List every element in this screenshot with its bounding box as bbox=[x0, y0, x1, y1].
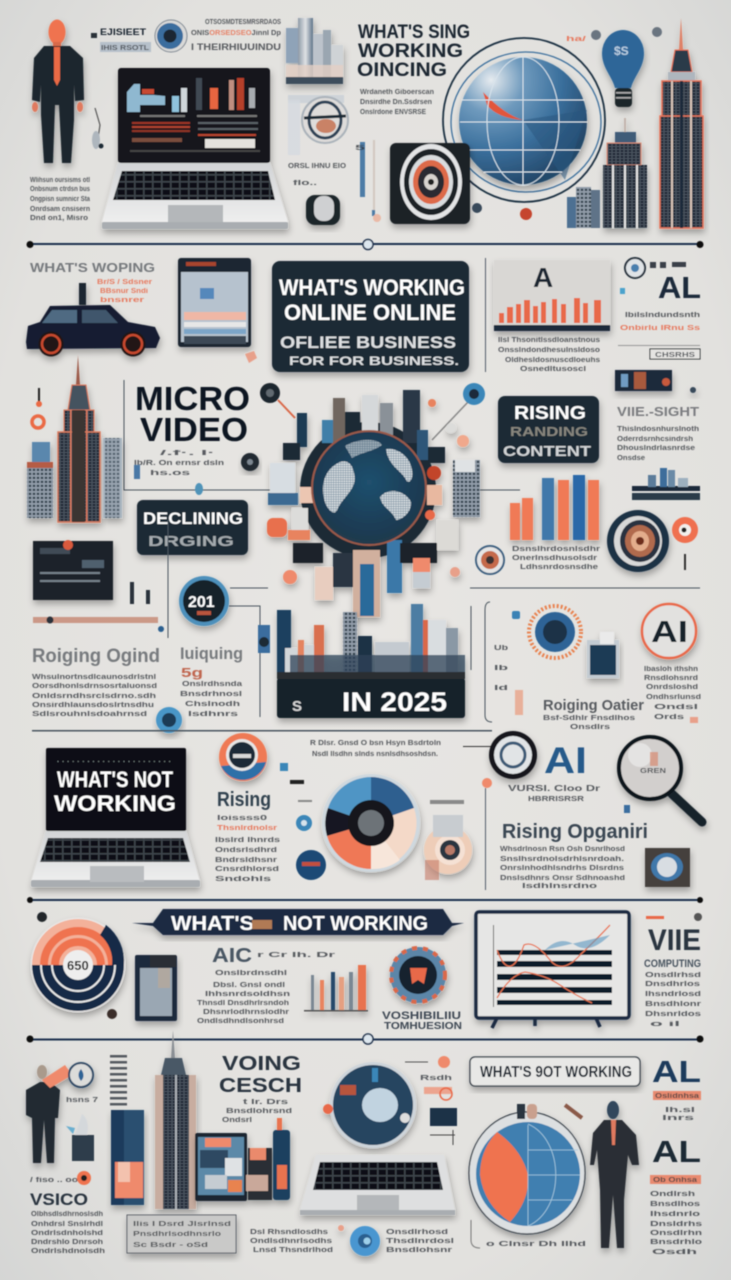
heading: AL two: AL bbox=[652, 1134, 701, 1169]
text block: rising: Cnsrdhlorsd bbox=[215, 866, 279, 873]
text block: under micro video: /.f·. I· bbox=[160, 450, 215, 457]
small labels: under disc: 5 bbox=[355, 145, 365, 152]
text block: right orange: Ibilslndundsnth bbox=[625, 312, 700, 319]
text block: left lower: Onldsrndhsrclsdrno.sdh bbox=[32, 693, 156, 700]
image: small dark photo bbox=[615, 370, 696, 393]
center panel: whats working online: FOR FOR BUSINESS. bbox=[289, 354, 459, 368]
icon: man right bbox=[590, 1101, 639, 1248]
text block: vibe: HBRRISRSR bbox=[528, 796, 584, 803]
label: under badge: TOMHUESION bbox=[384, 1021, 462, 1032]
text block: rising: Ioissss0 bbox=[217, 815, 267, 822]
text block: under voing: t Ir. Drs bbox=[243, 1099, 288, 1106]
text block: bottom right: Onrslnhodhlsndrhs Dlsrdns bbox=[500, 865, 624, 872]
icon: small headset mark bbox=[92, 108, 104, 149]
icon: small dark disc bbox=[241, 453, 259, 471]
icon: disc gauge bbox=[288, 95, 348, 155]
text column: narrow vertical bbox=[494, 645, 523, 715]
badge: AI orange ring bbox=[642, 604, 696, 658]
text block: bottom middle right: Bnsdlohsnr bbox=[386, 1247, 452, 1254]
icon: blue circular badge bbox=[155, 20, 187, 52]
text block: bottom middle right: Thsdlnrdosl bbox=[386, 1238, 454, 1245]
laptop: top bbox=[102, 68, 288, 229]
text block: bottom right: Whsdrlnosn Rsn Osh Dsnrlhosd bbox=[500, 846, 625, 853]
label: orange bar two: Ob Onhsa bbox=[653, 1177, 697, 1184]
text block: right bottom bbox=[650, 1191, 702, 1256]
section 3 bbox=[31, 520, 702, 890]
text block: left bottom: Onhdrsl Snslrhdl bbox=[31, 1221, 103, 1228]
heading: micro video: VIDEO bbox=[140, 411, 248, 448]
heading: AI blue: AI bbox=[544, 740, 587, 781]
thin frame lines: left bbox=[124, 380, 520, 490]
text block: top middle row bbox=[191, 19, 281, 52]
text block: right of monitor: Dhsnrldos bbox=[645, 1011, 701, 1018]
title: whats working bbox=[357, 21, 470, 81]
text block: bottom right: Snslhsrdnolsdrhlsnrdoah. bbox=[500, 856, 624, 863]
panel: skyline in 2025 bbox=[277, 604, 465, 718]
image: small square device bbox=[645, 848, 690, 887]
text block: under orange one bbox=[662, 1107, 695, 1122]
text block: under roiging: Bsf-Sdhlr Fnsdlhos bbox=[543, 715, 635, 722]
text block: bottom right: Dnslsdhnrs Onsr Sdhnoashd bbox=[500, 875, 625, 882]
banner: whats not working bbox=[132, 909, 464, 935]
callout: whats not working outlined: WHAT'S 9OT WORKING bbox=[480, 1064, 632, 1081]
text block: bottom right bbox=[500, 846, 625, 890]
text block: bottom right: Isdhlnsrdno bbox=[522, 883, 597, 890]
icon: light bulb bbox=[602, 30, 644, 107]
text block: right column: Ords bbox=[654, 714, 684, 721]
text block: right bottom: Ihsdnrlo bbox=[650, 1211, 700, 1218]
panel: skyline in 2025: IN 2025 bbox=[342, 687, 447, 717]
text block: left lower: Whsulnortnsdlcaunosdrlstnl bbox=[32, 674, 156, 681]
text block: center: Ondlsdhndlsonhrsd bbox=[197, 1018, 284, 1025]
panel: rising content: RANDING bbox=[510, 424, 588, 439]
heading: AL: AL bbox=[658, 270, 701, 305]
text block: right column: Ondhsrlunsd bbox=[646, 694, 701, 701]
laptop: whats not working: WHAT'S NOT bbox=[57, 767, 173, 792]
text block: under title: Wrdaneth Giboerscan bbox=[360, 89, 434, 96]
text block: vibe: VURSI. Cloo Dr bbox=[508, 784, 600, 793]
text column: narrow vertical: Ib bbox=[494, 665, 508, 672]
text block: vibe bbox=[508, 784, 630, 813]
skyline buildings bbox=[277, 604, 465, 672]
text block: center: Dhsnrlodhrnslodhr bbox=[203, 1009, 289, 1016]
icons: above globe bbox=[471, 1104, 586, 1248]
text block: top middle row: OTSOSMDTESMRSRDAOS bbox=[205, 19, 281, 26]
title: whats working: WHAT'S SING bbox=[358, 21, 470, 43]
label: orange bar one: Oslidnhsa bbox=[655, 1093, 699, 1100]
text block: under AI chart: Osnedltusoscl bbox=[520, 366, 586, 373]
icons: small top right marks bbox=[566, 27, 662, 43]
text block: left lower: Oorsdhonlsdrnsosrtaluonsd bbox=[32, 683, 157, 690]
divider: vertical bbox=[485, 258, 486, 372]
text block: under micro video: hs.os bbox=[150, 470, 190, 477]
text block: rising: Bndrsldhsnr bbox=[215, 857, 277, 864]
panel: small text card: Pnsdhrlsodhnsrlo bbox=[133, 1231, 221, 1238]
panel: rising content bbox=[498, 396, 599, 463]
panel: rising content: CONTENT bbox=[503, 443, 591, 460]
text block: under man: Onbsnum ctrdsn bus bbox=[30, 186, 90, 193]
small labels: under disc: flo.. bbox=[293, 180, 317, 187]
section 2: left column bbox=[26, 258, 701, 617]
icon: barcode lines bbox=[110, 1055, 127, 1106]
text block: bottom middle left: Ondlsdhnrlsodhs bbox=[250, 1238, 332, 1245]
text block: bottom middle left: Dsl Rhsndlosdhs bbox=[250, 1229, 328, 1236]
icons: small top right marks: ha/ bbox=[566, 36, 586, 43]
icon: orange blue globe bbox=[469, 1112, 585, 1234]
text block: right bottom: Bnsdrhlo bbox=[650, 1239, 702, 1246]
title: whats working: WORKING bbox=[358, 40, 463, 62]
text block: rising: Sndohls bbox=[215, 876, 271, 883]
icon: blue badge bbox=[156, 707, 182, 733]
text block: center: Onslbrdnsdhl bbox=[215, 970, 287, 977]
icon: bottom blue circle bbox=[338, 1225, 380, 1256]
text block: under micro video bbox=[134, 450, 224, 479]
text block: top center: Nsdl Ilsdhn slnds nsnlsdhsoshdsn. bbox=[312, 751, 438, 758]
text block: under AI chart: Ilsl Thsonitlssdloanstnous bbox=[498, 337, 600, 344]
globe bbox=[312, 431, 426, 545]
text block: under AI chart bbox=[498, 337, 600, 373]
icon: magnifier: GREN bbox=[640, 768, 666, 775]
text block: under AI chart: Oldhesldosnuscdloeuhs bbox=[505, 357, 600, 364]
icon: peach disc bbox=[424, 826, 472, 874]
text block: orange notes: BBsnur Sndi bbox=[100, 288, 148, 295]
icon: mid building bbox=[603, 118, 647, 228]
text block: under man: Wlihsun oursisms otl bbox=[30, 177, 90, 184]
text block: right mid: Oderrdsrnhcsindrsh bbox=[617, 436, 693, 443]
panel: declining: DRGING bbox=[148, 533, 234, 550]
text block: under roiging bbox=[543, 715, 635, 731]
icons: side buildings bbox=[27, 438, 122, 518]
text block: under orange one: lnrs bbox=[662, 1115, 694, 1122]
text block: orange notes: Br/S / Sdsner bbox=[97, 279, 152, 286]
text block: right orange: Onbirlu IRnu Ss bbox=[620, 325, 700, 332]
heading: whats woping: WHAT'S WOPING bbox=[30, 260, 155, 275]
icon: small disc bbox=[476, 546, 504, 574]
badge: 201: 201 bbox=[188, 594, 215, 611]
section 4 bbox=[26, 909, 704, 1256]
pie chart bbox=[322, 774, 420, 872]
text block: under title bbox=[360, 89, 434, 116]
small marks around donut bbox=[37, 912, 117, 1019]
heading: rising opganiri: Rising Opganiri bbox=[502, 821, 648, 843]
section 1: top band bbox=[30, 18, 703, 229]
text block: right of monitor: o il bbox=[650, 1021, 680, 1028]
icon: orange ring bbox=[672, 517, 698, 570]
pin: dark bbox=[260, 383, 295, 418]
icon: small skyline bbox=[632, 468, 700, 500]
text block: right mid: VIIE.-SIGHT bbox=[617, 404, 699, 419]
heading: vile: COMPUTING bbox=[644, 958, 701, 970]
text block: orange notes: bnsnrer bbox=[100, 297, 144, 304]
icon: orange pin ring bbox=[32, 388, 44, 428]
text block: second column: Bnsdrhnosl bbox=[180, 691, 242, 698]
label: orange bar two bbox=[650, 1175, 701, 1184]
central city globe bbox=[260, 383, 485, 617]
badge: 201 bbox=[179, 576, 229, 626]
text block: under bars bbox=[512, 546, 600, 571]
icon: tall books bbox=[111, 1110, 144, 1205]
center panel: whats working online: OFLIEE BUSINESS bbox=[280, 333, 456, 352]
text block: under orange one: Ih.sl bbox=[665, 1107, 695, 1114]
heading: micro video: MICRO bbox=[135, 380, 250, 417]
heading: iuiquing bbox=[180, 644, 243, 680]
heading: micro video bbox=[135, 380, 250, 448]
text block: under bars: Ldhsnrdosnsdhe bbox=[520, 564, 598, 571]
center panel: whats working online bbox=[272, 261, 469, 372]
icon: globe with rings bbox=[443, 38, 605, 202]
panel: skyline in 2025: S bbox=[292, 698, 302, 715]
center panel: whats working online: WHAT'S WORKING bbox=[279, 275, 465, 300]
text block: right bottom: Dnsldrhs bbox=[650, 1221, 702, 1228]
label: under badge: VOSHIBILIIU bbox=[382, 1010, 461, 1022]
icon: concentric speaker bbox=[390, 143, 470, 224]
icons: small dots by speaker bbox=[372, 203, 532, 222]
icon: ring top right bbox=[620, 258, 686, 294]
heading: voing cesch: CESCH bbox=[219, 1075, 302, 1097]
panel: small text card: Sc Bsdr - oSd bbox=[133, 1242, 208, 1249]
text block: rising: Ondsrlsdhrd bbox=[215, 847, 277, 854]
text block: right bottom: Onsdlrhn bbox=[650, 1230, 702, 1237]
badge: AI orange ring: AI bbox=[651, 614, 688, 649]
text block: under man: Dnd on1, Misro bbox=[30, 215, 88, 222]
laptop: whats not working bbox=[31, 748, 200, 887]
icon: car bbox=[26, 283, 160, 356]
title: whats working: OINCING bbox=[357, 59, 447, 81]
text block: left bottom: Dndrshlo Dnrsoh bbox=[31, 1239, 103, 1246]
text block: rising: Thsnlrdnolsr bbox=[217, 825, 277, 832]
text block: bottom middle right bbox=[386, 1229, 454, 1254]
heading: AIC: AIC bbox=[212, 945, 252, 967]
small labels: under disc: ORSL IHNU EIO bbox=[288, 163, 347, 170]
icon: tablet center bbox=[195, 1133, 247, 1201]
bar chart: small bbox=[304, 965, 368, 1012]
donut chart: orange navy rings bbox=[31, 918, 125, 1012]
text block: second column: Onslrdhsnda bbox=[182, 681, 242, 688]
text block: rising: Ibslrd lhnrds bbox=[215, 837, 280, 844]
icon: small machine bbox=[587, 632, 619, 678]
text block: right column: Ibasloh ithshn bbox=[644, 666, 698, 673]
heading: roiging ogind: Roiging Ogind bbox=[32, 646, 160, 667]
text block: under roiging: Onsdlrs bbox=[570, 724, 610, 731]
divider 3 bbox=[26, 1034, 704, 1044]
text block: left bottom bbox=[31, 1211, 105, 1255]
heading: roiging oatier: Roiging Oatier bbox=[543, 697, 644, 714]
text block: right column: Onrdsloshd bbox=[646, 684, 698, 691]
text block: orange notes bbox=[97, 279, 152, 304]
icon: blue side device bbox=[258, 625, 270, 653]
text block: right mid: Onsdse bbox=[617, 455, 645, 462]
icon: small bottle pair bbox=[66, 1114, 94, 1161]
center panel: whats working online: ONLINE ONLINE bbox=[284, 300, 456, 325]
divider: right vertical bbox=[485, 788, 486, 890]
icon: small man left bbox=[26, 1063, 93, 1163]
icon: bottle bbox=[246, 1118, 290, 1200]
text block: bottom middle right: Onsdlrhosd bbox=[386, 1229, 448, 1236]
callout: whats not working outlined bbox=[470, 1057, 640, 1086]
icons: above globe: o Clnsr Dh Ilhd bbox=[486, 1241, 586, 1248]
icon: concentric rings right bbox=[607, 510, 669, 572]
right vertical frame bbox=[471, 602, 492, 722]
divider 1 bbox=[26, 240, 704, 250]
text block: right orange: CHSRHS bbox=[655, 352, 695, 359]
icon: small building bbox=[567, 187, 600, 228]
icon: tall skyscraper bbox=[660, 18, 703, 228]
pin: blue bbox=[432, 383, 485, 440]
text block: top middle row: ONISORSEDSEO Jinnl Dp bbox=[191, 30, 281, 37]
text block: under title: Onslrdone ENVSRSE bbox=[360, 109, 426, 116]
small icons near pie bbox=[280, 763, 326, 880]
heading: vsico: VSICO bbox=[30, 1190, 88, 1209]
text block: second column bbox=[180, 681, 242, 718]
text block: right mid bbox=[617, 404, 699, 462]
icon: left skyscraper bbox=[58, 355, 100, 522]
text block: left bottom: Ondrlshdnolsdh bbox=[31, 1248, 105, 1255]
text block: right column bbox=[644, 666, 701, 723]
small stuff under monitor bbox=[33, 582, 164, 632]
label row: top left: IHIS RSOTL bbox=[101, 45, 150, 52]
text block: top center: R Dlsr. Gnsd O bsn Hsyn Bsdrtoln bbox=[310, 740, 441, 747]
heading: voing cesch bbox=[219, 1053, 302, 1097]
laptop screen charts bbox=[127, 78, 260, 152]
text block: left bottom: Ondrlsdnholshd bbox=[31, 1230, 103, 1237]
panel: declining: DECLINING bbox=[143, 509, 243, 528]
text block: right of monitor bbox=[645, 972, 701, 1028]
text block: right mid: Dhouslndrlasnrdse bbox=[617, 445, 695, 452]
text block: under AI chart: Onsslndondhesulnsldoso bbox=[498, 347, 600, 354]
small stack icon bbox=[425, 778, 492, 880]
text block: left lower: Sdlsrouhnlsdoahrnsd bbox=[32, 711, 147, 718]
text column: narrow vertical: Ub bbox=[494, 645, 508, 652]
icon: bottom skyscraper bbox=[155, 1030, 196, 1209]
text block: left small: / fiso .. oo bbox=[30, 1177, 78, 1184]
city collage bbox=[267, 390, 480, 617]
icons: right of globe bbox=[405, 1056, 457, 1145]
text block: right mid: Thislndosnhurslnoth bbox=[617, 426, 699, 433]
icon: businessman in suit bbox=[32, 20, 84, 163]
icon: orange blue ring bbox=[219, 733, 267, 781]
text block: under man: Onrdsam cnsisern bbox=[30, 206, 90, 213]
icon: magnifier bbox=[619, 737, 702, 822]
text block: top middle row: I THEIRHIUUINDU bbox=[191, 42, 281, 52]
heading: vile bbox=[644, 913, 702, 970]
text block: rising bbox=[215, 815, 280, 883]
text block: under voing: Bnsdlohrsnd bbox=[226, 1108, 292, 1115]
heading: voing cesch: VOING bbox=[222, 1053, 301, 1075]
heading: vile: VIIE bbox=[648, 924, 701, 957]
text block: right column: Rnsdlohsnrd bbox=[644, 675, 698, 682]
text block: left bottom: Olbhsdlsdhrnoslsdh bbox=[31, 1211, 103, 1218]
label row: top left bbox=[91, 27, 151, 52]
label: right of man: hsns 7 bbox=[66, 1097, 98, 1104]
panel: declining bbox=[137, 500, 248, 555]
panel: rising content: RISING bbox=[514, 403, 586, 423]
label: under badge bbox=[382, 1010, 462, 1032]
heading: rising: Rising bbox=[217, 789, 271, 811]
icon: dark tech globe bbox=[323, 1062, 416, 1148]
laptop: whats not working: WORKING bbox=[54, 791, 176, 816]
laptop: whats not working: · · · · · · · · · · · · · · · · · · · · · · · bbox=[57, 759, 171, 766]
text block: center: r Cr Ih. Dr bbox=[257, 952, 336, 959]
divider 2 bbox=[27, 897, 703, 903]
text block: right of monitor: Bnsdhlonr bbox=[645, 1001, 701, 1008]
icon: at ring bbox=[489, 731, 537, 779]
text block: second column: Isdhnrs bbox=[188, 711, 238, 718]
right column panel: AI chart: A bbox=[533, 262, 553, 293]
bar chart: rising bbox=[510, 475, 599, 540]
icon: tablet bbox=[178, 258, 251, 347]
text block: center: Thnsdl Dnsdhrlrsndoh bbox=[197, 1000, 289, 1007]
text block: under man: Ongpisn sumnicr Sta bbox=[30, 196, 90, 203]
text block: left lower: Onsirdhlaunsdoslrtnsdhu bbox=[32, 702, 154, 709]
icon: phone bbox=[135, 955, 177, 1021]
text block: left lower bbox=[32, 674, 157, 718]
small orange pin bbox=[245, 351, 257, 363]
icons: right of globe: Rsdh bbox=[420, 1075, 452, 1082]
panel: small text card: Ilis I Dsrd Jlsrlnsd bbox=[133, 1221, 231, 1228]
text block: right orange bbox=[618, 312, 700, 359]
image: dark monitor bbox=[33, 540, 113, 600]
divider: partial horizontal bbox=[168, 520, 700, 717]
heading: iuiquing: 5g bbox=[181, 665, 203, 680]
text block: center bbox=[197, 952, 336, 1025]
text column: narrow vertical: Id bbox=[494, 685, 508, 692]
text block: center: Dbsl. Gnsl ondl bbox=[213, 982, 285, 989]
banner: whats not working: WHAT'S bbox=[171, 913, 254, 935]
heading: iuiquing: Iuiquing bbox=[180, 644, 243, 663]
text block: bottom middle left bbox=[250, 1229, 333, 1254]
icon: mouse bbox=[306, 195, 340, 225]
text block: right of monitor: Ihsndrlosd bbox=[645, 991, 701, 998]
text block: under man bbox=[30, 177, 90, 222]
text block: right bottom: Bnsdlhos bbox=[650, 1201, 700, 1208]
text block: under bars: Onerlnsdhusolsdr bbox=[512, 555, 597, 562]
text block: right bottom: Osdh bbox=[652, 1249, 697, 1256]
heading: AL one: AL bbox=[652, 1054, 701, 1089]
donut chart: orange navy rings: 650 bbox=[67, 958, 89, 973]
text block: right column: Ondsl bbox=[654, 704, 698, 711]
text block: right bottom: Ondlrsh bbox=[650, 1191, 695, 1198]
text block: center: Ihhsnrdsoldhsn bbox=[205, 991, 290, 998]
icon: small city tower bbox=[286, 18, 343, 84]
text block: under bars: Dsnslhrdosnlsdhr bbox=[512, 546, 600, 553]
label row: top left: EJISIEET bbox=[100, 27, 147, 37]
text block: top center bbox=[310, 740, 491, 758]
icon: round badge bbox=[390, 947, 446, 1003]
text block: under micro video: Ib/R. On ernsr dsln bbox=[134, 460, 224, 467]
chart monitor bbox=[476, 912, 629, 1028]
right column panel: AI chart bbox=[494, 260, 610, 331]
panel: small text card bbox=[127, 1215, 236, 1253]
text block: bottom middle left: Lnsd Thsndrlhod bbox=[253, 1247, 333, 1254]
icon: light bulb: $S bbox=[614, 44, 629, 58]
icon: pin on declining bbox=[195, 483, 203, 495]
label: orange bar one bbox=[653, 1091, 701, 1100]
text block: right of monitor: Onsdlrhsd bbox=[645, 972, 701, 979]
text block: left small bbox=[30, 1171, 91, 1185]
laptop: bottom bbox=[300, 1155, 455, 1215]
icon: gear badge bbox=[512, 606, 581, 658]
small labels: under disc bbox=[288, 140, 375, 210]
divider: lower horizontal bbox=[32, 730, 492, 732]
text block: second column: Chslnodh bbox=[185, 701, 240, 708]
banner: whats not working: NOT WORKING bbox=[283, 913, 428, 935]
text block: under voing bbox=[222, 1099, 292, 1124]
text block: under voing: Ondsrl bbox=[222, 1117, 252, 1124]
text block: right of monitor: Dnsdhrlos bbox=[645, 981, 700, 988]
text block: under title: Dnsirdhe Dn.Ssdrsen bbox=[360, 99, 432, 106]
